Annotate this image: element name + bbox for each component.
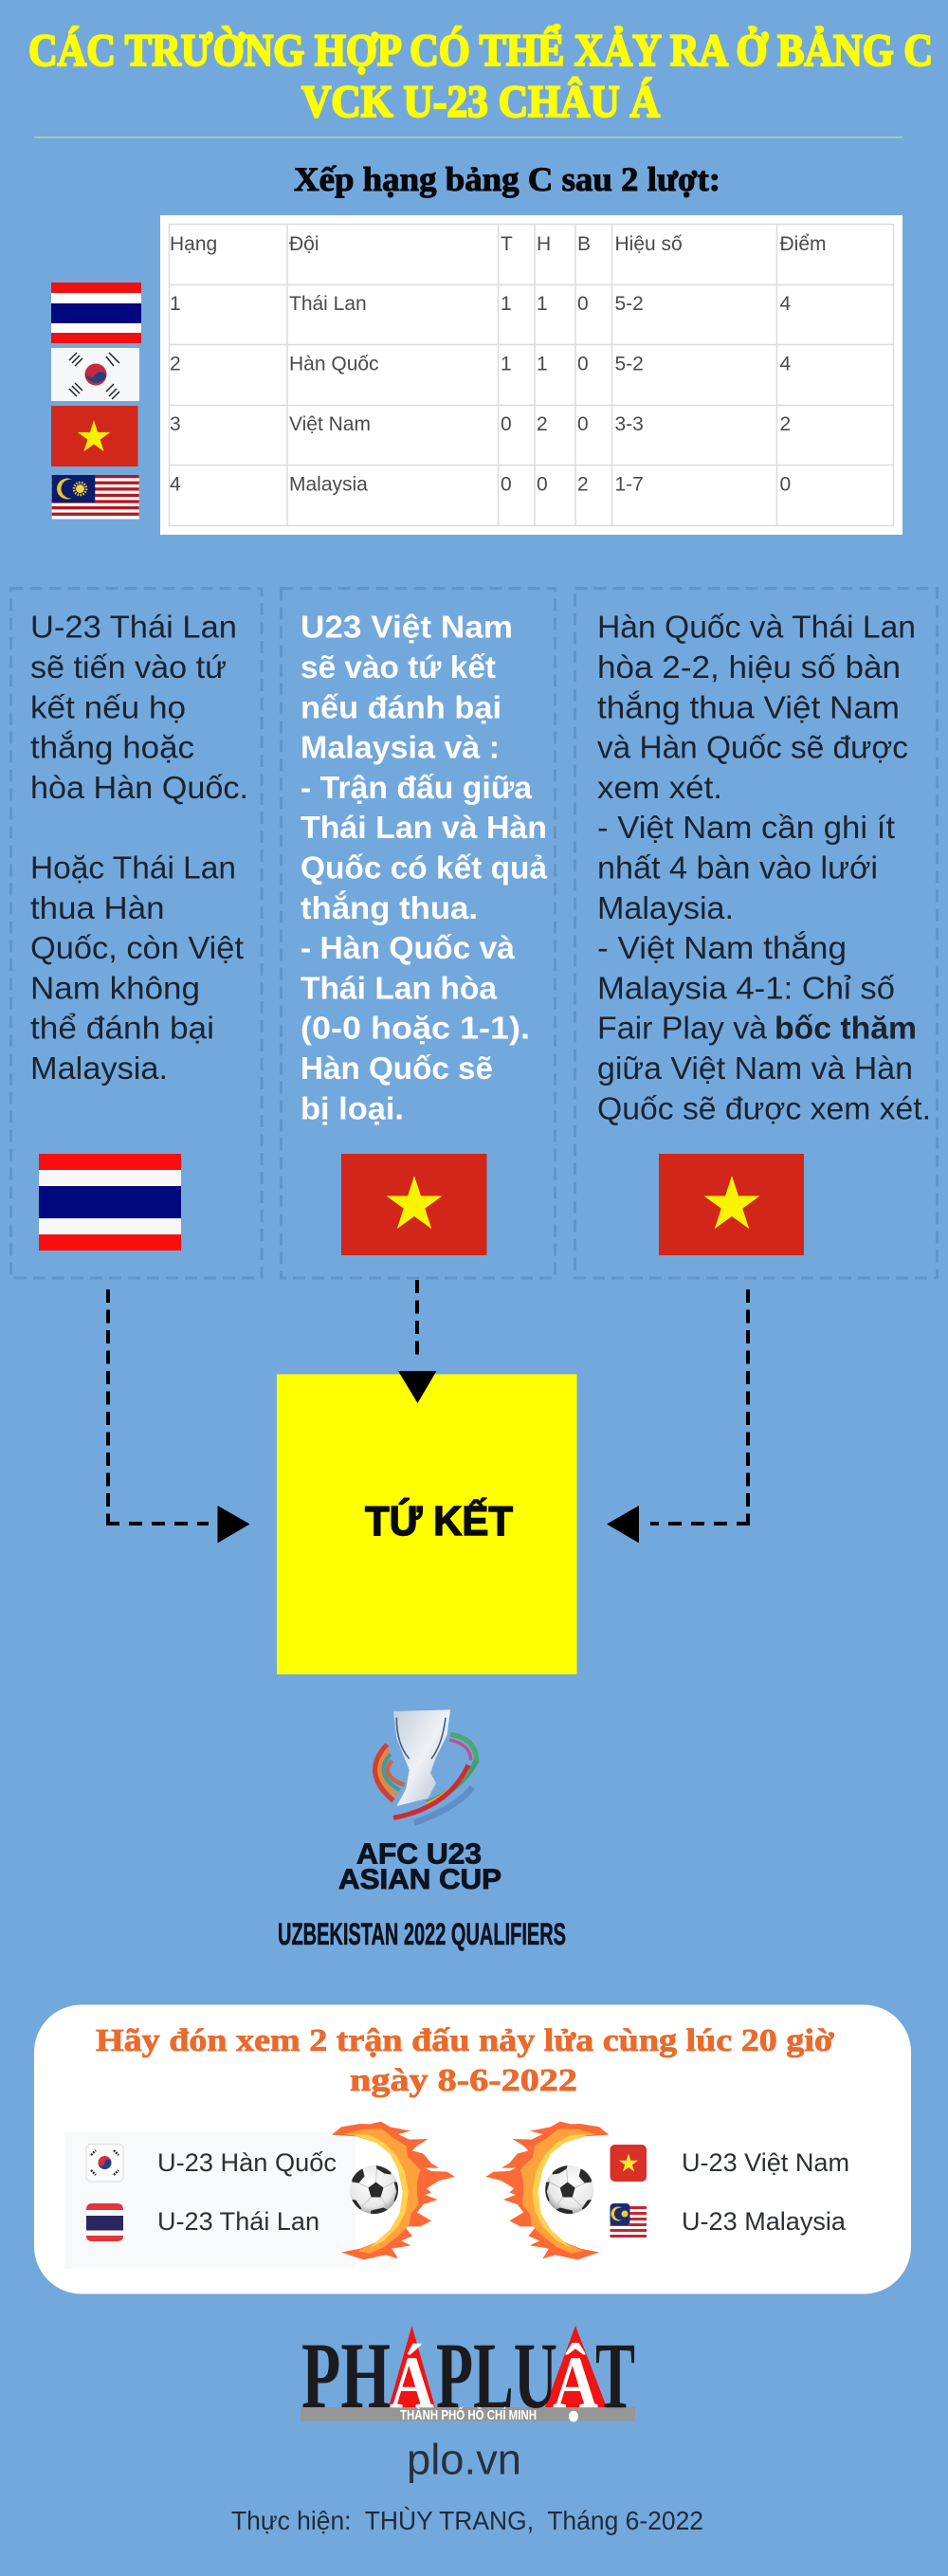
row: Thái Lan: 0 xyxy=(577,293,589,315)
arrow: draw scenario to quarter final xyxy=(607,1289,750,1544)
icon: flag South Korea xyxy=(51,348,139,401)
scenario text Vietnam bold: Hàn Quốc sẽ xyxy=(301,1050,493,1086)
scenario text draw: Quốc sẽ được xem xét. xyxy=(597,1090,931,1125)
flags column xyxy=(51,283,141,520)
row: Thái Lan: 5-2 xyxy=(614,293,644,315)
table header row: B xyxy=(577,233,591,255)
scenario text Thailand: hòa Hàn Quốc. xyxy=(30,770,248,805)
table header row: Hiệu số xyxy=(614,233,683,255)
scenario text Vietnam bold: (0-0 hoặc 1-1). xyxy=(301,1011,530,1046)
scenario text Vietnam bold xyxy=(301,610,548,1125)
logo: AFC U23 Asian Cup: AFC U23 xyxy=(356,1837,482,1871)
arrow: Vietnam to quarter final xyxy=(398,1280,436,1403)
logo: Pháp Luật newspaper: PH xyxy=(301,2323,391,2428)
panel: scenario Vietnam win xyxy=(281,588,556,1278)
scenario text Thailand: thể đánh bại xyxy=(30,1011,214,1046)
scenario text Thailand: Hoặc Thái Lan xyxy=(30,850,236,886)
scenario text draw: và Hàn Quốc sẽ được xyxy=(597,730,908,765)
logo: Pháp Luật newspaper: THÀNH PHỐ HỒ CHÍ MINH xyxy=(400,2406,537,2423)
scenario text draw: Fair Play và xyxy=(597,1011,768,1046)
scenario text Vietnam bold: U23 Việt Nam xyxy=(301,610,513,645)
row: Hàn Quốc xyxy=(170,353,791,375)
scenario text draw: Malaysia. xyxy=(597,890,734,925)
match: Vietnam vs Malaysia teams xyxy=(611,2145,849,2241)
row: Malaysia: 0 xyxy=(779,474,791,495)
scenario text draw: bốc thăm xyxy=(775,1011,917,1046)
scenario text Thailand: kết nếu họ xyxy=(30,689,186,724)
icon: trophy with ribbons xyxy=(375,1709,477,1823)
row: Thái Lan: 1 xyxy=(537,293,548,315)
box: quarter final: TỨ KẾT xyxy=(365,1497,513,1544)
scenario text draw: Hàn Quốc và Thái Lan xyxy=(597,610,916,645)
scenario text draw: Malaysia 4-1: Chỉ số xyxy=(597,970,895,1005)
logo: Pháp Luật newspaper: Ậ xyxy=(553,2341,598,2423)
scenario text Thailand: sẽ tiến vào tứ xyxy=(30,649,227,685)
scenario text draw: giữa Việt Nam và Hàn xyxy=(597,1050,913,1086)
icon: flag South Korea small xyxy=(86,2145,123,2182)
table header row: Hạng xyxy=(170,233,217,255)
match: Vietnam vs Malaysia teams: U-23 Malaysia xyxy=(682,2207,846,2236)
row: Việt Nam: 2 xyxy=(537,413,548,435)
scenario text Thailand: thắng hoặc xyxy=(30,730,194,765)
scenario text Vietnam bold: Malaysia và : xyxy=(301,730,500,765)
scenario text Vietnam bold: thắng thua. xyxy=(301,890,478,925)
match: South Korea vs Thailand teams: U-23 Hàn Quốc xyxy=(157,2148,337,2177)
table heading: Xếp hạng bảng C sau 2 lượt: xyxy=(294,160,720,198)
row: Việt Nam: 0 xyxy=(501,413,512,435)
icon: flag Thailand small xyxy=(86,2203,123,2241)
logo: AFC U23 Asian Cup xyxy=(278,1709,566,1951)
scenario text Vietnam bold: Quốc có kết quả xyxy=(301,850,548,886)
table header row: Điểm xyxy=(779,233,827,255)
scenario text Thailand: U-23 Thái Lan xyxy=(30,610,237,645)
match: South Korea vs Thailand teams xyxy=(64,2132,356,2269)
scenario text draw: - Việt Nam cần ghi ít xyxy=(597,810,895,845)
row: Malaysia xyxy=(170,474,791,495)
match: South Korea vs Thailand teams: U-23 Thái Lan xyxy=(157,2207,319,2236)
panel: scenario Thailand xyxy=(11,588,262,1278)
row: Hàn Quốc: 1 xyxy=(501,353,512,375)
icon: left flame with ball xyxy=(332,2122,455,2259)
table header row: T xyxy=(501,233,513,255)
row: Malaysia: 0 xyxy=(537,474,548,495)
row: Malaysia: 0 xyxy=(501,474,512,495)
scenario text Vietnam bold: nếu đánh bại xyxy=(301,689,501,724)
promo heading: ngày 8-6-2022 xyxy=(350,2063,577,2098)
row: Hàn Quốc: 5-2 xyxy=(614,353,644,375)
row: Thái Lan xyxy=(170,293,791,315)
row: Hàn Quốc: 2 xyxy=(170,353,181,375)
title: VCK U-23 CHÂU Á xyxy=(301,76,660,127)
row: Malaysia: 1-7 xyxy=(614,474,644,495)
scenario text draw: thắng thua Việt Nam xyxy=(597,689,900,724)
table header row xyxy=(170,233,827,255)
scenario text draw: nhất 4 bàn vào lưới xyxy=(597,850,878,886)
logo: Pháp Luật newspaper xyxy=(301,2323,635,2428)
scenario text draw: hòa 2-2, hiệu số bàn xyxy=(597,649,901,685)
match: Vietnam vs Malaysia teams: U-23 Việt Nam xyxy=(682,2148,849,2177)
icon: flag Malaysia xyxy=(52,475,139,520)
table header row: Đội xyxy=(289,233,319,255)
panel: match promo xyxy=(34,2004,911,2294)
logo: AFC U23 Asian Cup: ASIAN CUP xyxy=(338,1864,501,1895)
row: Thái Lan: Thái Lan xyxy=(289,293,367,315)
scenario text Vietnam bold: sẽ vào tứ kết xyxy=(301,649,496,685)
row: Hàn Quốc: 1 xyxy=(537,353,548,375)
icon: flag Vietnam large xyxy=(341,1154,487,1255)
icon: flag Vietnam small xyxy=(611,2145,647,2182)
row: Việt Nam: 2 xyxy=(779,413,791,435)
logo: Pháp Luật newspaper: PLU xyxy=(436,2323,557,2428)
logo: Pháp Luật newspaper: Á xyxy=(390,2341,434,2423)
scenario text Vietnam bold: - Trận đấu giữa xyxy=(301,770,533,805)
icon: flag Thailand large xyxy=(39,1154,181,1251)
logo: Pháp Luật newspaper: T xyxy=(595,2323,635,2428)
scenario text Thailand: Quốc, còn Việt xyxy=(30,930,244,965)
row: Malaysia: 2 xyxy=(577,474,589,495)
credits: Thực hiện: THÙY TRANG, Tháng 6-2022 xyxy=(231,2506,703,2535)
row: Việt Nam: Việt Nam xyxy=(289,413,371,435)
scenario text Vietnam bold: Thái Lan hòa xyxy=(301,970,498,1005)
row: Việt Nam xyxy=(170,413,791,435)
scenario text Thailand: Malaysia. xyxy=(30,1050,168,1086)
title xyxy=(28,24,933,127)
icon: flag Vietnam large xyxy=(659,1154,804,1255)
row: Thái Lan: 4 xyxy=(779,293,791,315)
box: quarter final xyxy=(277,1375,576,1674)
scenario text Thailand: Nam không xyxy=(30,970,200,1005)
panel: scenario draw 2-2 xyxy=(574,588,937,1278)
row: Việt Nam: 3 xyxy=(170,413,181,435)
row: Việt Nam: 3-3 xyxy=(614,413,644,435)
website: plo.vn xyxy=(407,2435,521,2484)
arrow: Thailand to quarter final xyxy=(106,1289,250,1544)
row: Thái Lan: 1 xyxy=(170,293,181,315)
scenario text draw: xem xét. xyxy=(597,770,722,805)
promo heading xyxy=(96,2023,834,2098)
standings table xyxy=(160,215,902,535)
icon: flag Thailand xyxy=(51,283,141,343)
scenario text Thailand xyxy=(30,610,248,1086)
scenario text Vietnam bold: bị loại. xyxy=(301,1090,404,1125)
promo heading: Hãy đón xem 2 trận đấu nảy lửa cùng lúc 20 giờ xyxy=(96,2023,834,2058)
row: Hàn Quốc: 4 xyxy=(779,353,791,375)
logo: AFC U23 Asian Cup: UZBEKISTAN 2022 QUALIFIERS xyxy=(278,1917,566,1951)
scenario text draw xyxy=(597,610,931,1125)
row: Malaysia: Malaysia xyxy=(289,474,368,495)
row: Thái Lan: 1 xyxy=(501,293,512,315)
row: Malaysia: 4 xyxy=(170,474,181,495)
row: Việt Nam: 0 xyxy=(577,413,589,435)
scenario text Vietnam bold: Thái Lan và Hàn xyxy=(301,810,547,845)
scenario text Vietnam bold: - Hàn Quốc và xyxy=(301,930,516,965)
scenario text Thailand: thua Hàn xyxy=(30,890,165,925)
icon: flag Malaysia small xyxy=(611,2203,647,2241)
scenario text draw: - Việt Nam thắng xyxy=(597,930,847,965)
icon: flag Vietnam xyxy=(51,406,138,466)
row: Hàn Quốc: Hàn Quốc xyxy=(289,353,379,375)
icon: right flame with ball xyxy=(485,2122,609,2259)
table header row: H xyxy=(537,233,551,255)
row: Hàn Quốc: 0 xyxy=(577,353,589,375)
